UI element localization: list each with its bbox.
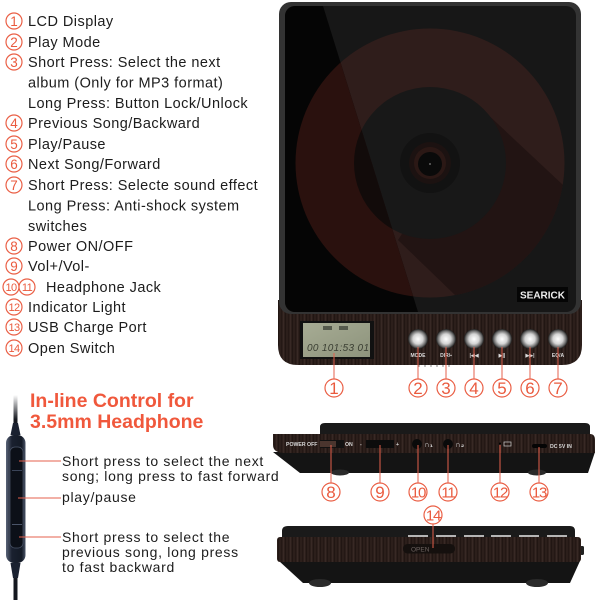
button: dir: DIR/▪ <box>440 353 452 359</box>
item 7: sound effect: Short Press: Selecte sound effect <box>28 178 258 194</box>
LCD display: 00 101:53 01 <box>307 343 369 354</box>
cable <box>14 395 18 600</box>
headphone jack 1: ∩₁ <box>424 440 434 449</box>
item 9: Volume: Vol+/Vol- <box>28 259 90 275</box>
button: play pause <box>492 329 512 359</box>
callout 5: 5 <box>497 379 507 398</box>
description: previous song: previous song, long press <box>62 544 239 560</box>
item 6: Next Song: 6 <box>10 157 18 172</box>
callout 10: 10 <box>411 484 426 502</box>
indicator light <box>499 442 511 446</box>
callout 9: 9 <box>375 483 385 502</box>
items 10 and 11: Headphone Jack: Headphone Jack <box>46 280 162 296</box>
item 7: sound effect: switches <box>28 219 87 235</box>
callout 11: 11 <box>441 484 455 502</box>
callout 8 <box>322 445 340 502</box>
wood control panel body <box>278 300 582 365</box>
device front edge view <box>277 506 584 587</box>
button: mode: MODE <box>410 353 426 359</box>
button: eq <box>548 329 568 359</box>
description: previous song: Short press to select the <box>62 529 230 545</box>
power switch: POWER OFF <box>286 442 317 448</box>
item 7: sound effect: Long Press: Anti-shock system <box>28 198 240 214</box>
item 7: sound effect: 7 <box>10 178 18 193</box>
SEARICK logo: SEARICK <box>520 290 566 302</box>
callout 3 <box>437 347 455 398</box>
item 2: Play Mode: 2 <box>10 35 18 50</box>
callout 9 <box>371 445 389 502</box>
item 8: Power: 8 <box>10 239 18 254</box>
callouts for the side view <box>322 445 548 502</box>
volume wheel <box>360 440 399 448</box>
open switch: OPEN <box>411 546 430 554</box>
wood band <box>273 434 595 453</box>
callouts for the top view <box>325 347 567 398</box>
lid edge <box>282 526 575 538</box>
item 14: Open Switch: Open Switch <box>28 341 115 357</box>
volume wheel: - <box>360 442 362 448</box>
item 3: album button <box>6 54 248 112</box>
item 3: album button: Long Press: Button Lock/Unlock <box>28 96 248 112</box>
button: previous <box>464 329 484 359</box>
speaker dots <box>418 365 450 367</box>
feet <box>331 470 349 476</box>
item 6: Next Song: Next Song/Forward <box>28 157 161 173</box>
callout 4 <box>465 347 483 398</box>
device side view <box>273 423 595 476</box>
item 3: album button: album (Only for MP3 format) <box>28 76 223 92</box>
feet <box>309 579 331 587</box>
item 5: Play/Pause: Play/Pause <box>28 137 106 153</box>
control buttons <box>408 329 568 359</box>
items 10 and 11: Headphone Jack: 10 <box>5 282 17 294</box>
lid edge <box>320 423 590 434</box>
power switch: ON <box>345 442 353 448</box>
item 14: Open Switch: 14 <box>8 343 20 355</box>
feature list <box>3 13 258 357</box>
headphone jack 2: ∩₂ <box>455 440 465 449</box>
heading: in-line control <box>30 390 204 433</box>
button: next: ▶▶| <box>524 353 535 359</box>
remote pointers <box>18 461 61 537</box>
item 3: album button: 3 <box>10 55 18 70</box>
item 12: Indicator Light: 12 <box>8 302 20 314</box>
item 4: Previous Song: Previous Song/Backward <box>28 116 200 132</box>
side knob <box>580 546 584 555</box>
USB port: DC 5V IN <box>550 444 572 450</box>
callout 12 <box>491 445 509 502</box>
device top view <box>278 2 582 367</box>
callout 14: 14 <box>426 508 441 524</box>
button: next <box>520 329 540 359</box>
callout 7: 7 <box>553 379 563 398</box>
callout 1 <box>325 353 343 398</box>
callout 2 <box>409 347 427 398</box>
button: mode <box>408 329 428 359</box>
heading: in-line control: In-line Control for <box>30 390 194 412</box>
lower shell <box>279 561 580 583</box>
callout 13: 13 <box>532 484 547 502</box>
headphone jack 1 <box>412 439 434 449</box>
button: play pause: ▶|| <box>498 353 506 359</box>
headphone jack 2 <box>443 439 465 449</box>
volume wheel: + <box>396 442 399 448</box>
item 13: USB Charge Port: USB Charge Port <box>28 320 147 336</box>
callout 13 <box>530 447 548 502</box>
callout 3: 3 <box>441 379 451 398</box>
item 5: Play/Pause: 5 <box>10 137 18 152</box>
in-line remote illustration <box>6 395 26 600</box>
open switch <box>403 544 455 554</box>
item 2: Play Mode: Play Mode <box>28 35 101 51</box>
item 7: sound effect <box>6 177 258 235</box>
remote body <box>6 435 26 563</box>
button: previous: |◀◀ <box>469 353 479 359</box>
callout 6: 6 <box>525 379 535 398</box>
item 1: LCD Display: 1 <box>10 14 18 29</box>
callout 4: 4 <box>469 379 479 398</box>
top buttons <box>408 535 567 537</box>
callout 6 <box>521 347 539 398</box>
glossy lid frame <box>279 2 581 314</box>
items 10 and 11: Headphone Jack: 11 <box>22 282 33 294</box>
description: next song: Short press to select the next <box>62 453 264 469</box>
button: eq: EQ/A <box>552 353 564 359</box>
item 9: Volume: 9 <box>10 259 18 274</box>
description: previous song: to fast backward <box>62 559 175 575</box>
description: play pause: play/pause <box>62 489 137 505</box>
description: next song: song; long press to fast forward <box>62 468 279 484</box>
callout 12: 12 <box>493 484 508 502</box>
callout 1: 1 <box>329 379 339 398</box>
item 12: Indicator Light: Indicator Light <box>28 300 126 316</box>
USB port <box>532 444 572 450</box>
item 1: LCD Display: LCD Display <box>28 14 114 30</box>
glossy lid with disc artwork <box>285 6 576 312</box>
power switch <box>286 440 353 448</box>
SEARICK logo <box>517 287 568 302</box>
item 13: USB Charge Port: 13 <box>8 322 20 334</box>
item 8: Power: Power ON/OFF <box>28 239 133 255</box>
callout 8: 8 <box>326 483 336 502</box>
callout 10 <box>409 445 427 502</box>
items 10 and 11: Headphone Jack <box>3 279 162 296</box>
callout 11 <box>439 445 457 502</box>
item 4: Previous Song: 4 <box>10 116 18 131</box>
callout 7 <box>549 347 567 398</box>
callout 14 <box>424 506 442 548</box>
description: next song <box>62 453 279 484</box>
wood band <box>277 537 581 562</box>
item 9: Volume <box>6 258 90 275</box>
lower shell <box>273 452 595 473</box>
LCD display <box>300 321 374 359</box>
item 3: album button: Short Press: Select the next <box>28 55 221 71</box>
description: previous song <box>62 529 239 575</box>
heading: in-line control: 3.5mm Headphone <box>30 411 204 433</box>
cable necks <box>10 423 20 578</box>
button: dir <box>436 329 456 359</box>
callout 5 <box>493 347 511 398</box>
callout 2: 2 <box>413 379 423 398</box>
